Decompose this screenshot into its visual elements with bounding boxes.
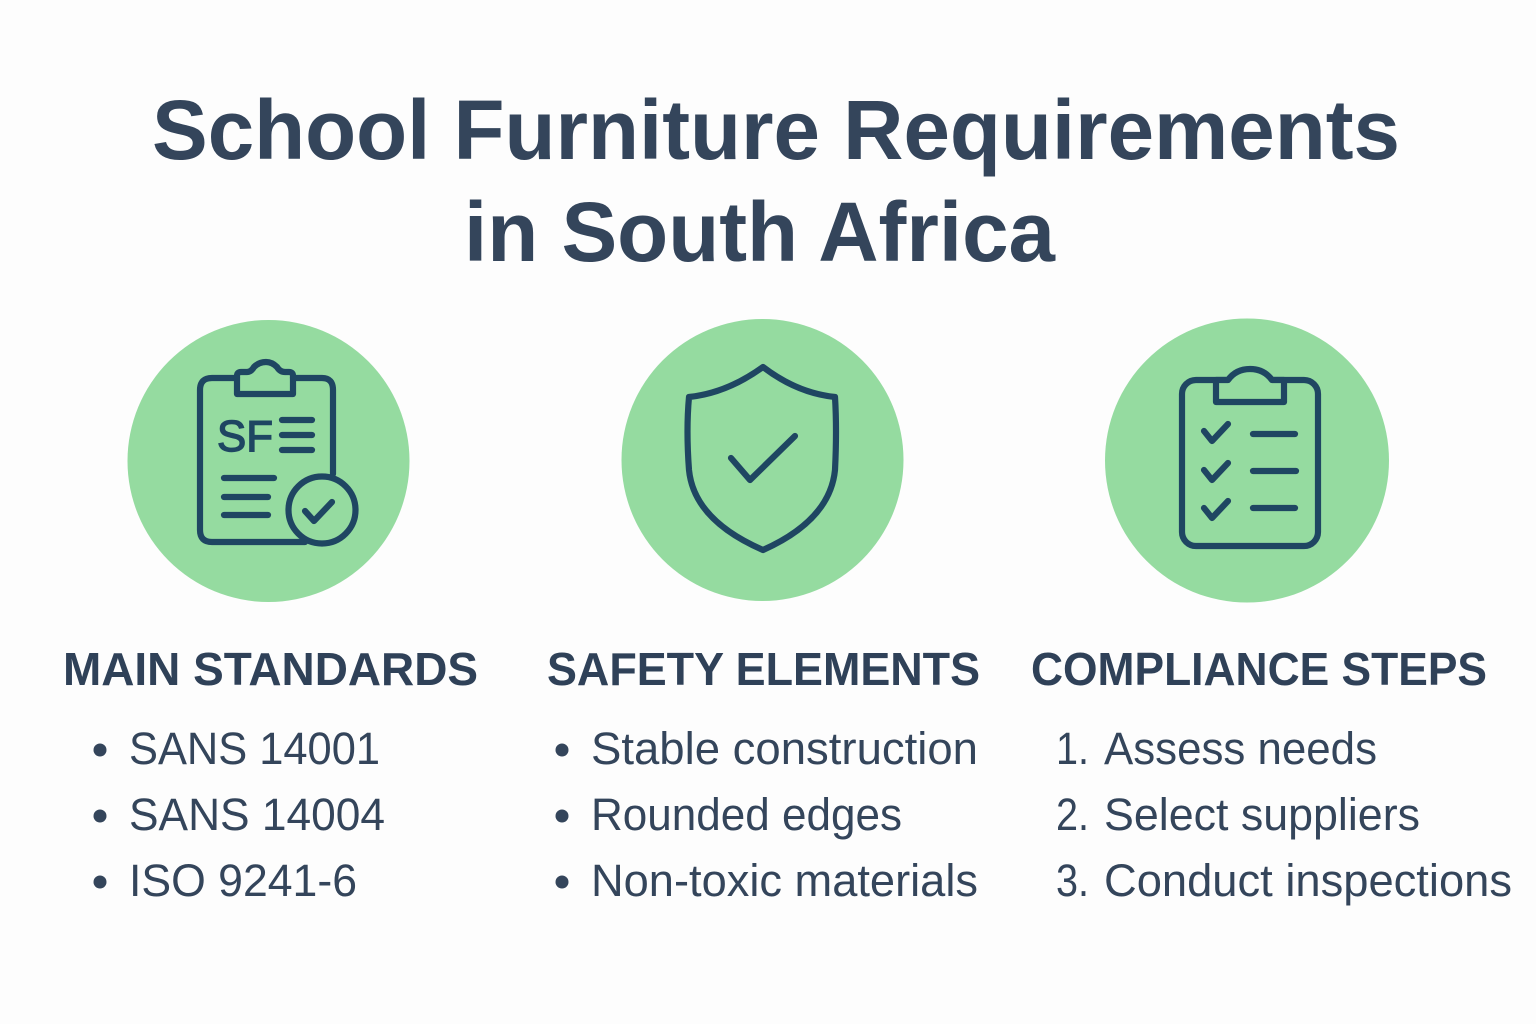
- list: safety: Rounded edges: [591, 789, 902, 840]
- list: standards: SANS 14004: [129, 789, 385, 840]
- list: steps: Conduct inspections: [1104, 855, 1512, 906]
- list: steps: Select suppliers: [1104, 789, 1420, 840]
- title: School Furniture Requirements: [152, 83, 1400, 177]
- title: in South Africa: [464, 185, 1056, 279]
- list: steps: 3.: [1056, 855, 1089, 906]
- panel: main standards: [63, 320, 478, 906]
- list: safety: Stable construction: [591, 723, 978, 774]
- list: steps: Assess needs: [1104, 723, 1377, 774]
- icon: shield with check: [622, 319, 904, 601]
- icon: standards clipboard: [128, 320, 410, 602]
- list: steps: [1056, 723, 1512, 906]
- panel: compliance steps: [1031, 318, 1512, 906]
- icon: standards clipboard: SF: [217, 412, 273, 461]
- list: standards: ISO 9241-6: [129, 855, 357, 906]
- heading: compliance steps: COMPLIANCE STEPS: [1031, 643, 1487, 695]
- list: standards: SANS 14001: [129, 723, 380, 774]
- list: standards: [94, 723, 385, 906]
- panel: safety elements: [547, 319, 980, 906]
- list: steps: 2.: [1056, 789, 1089, 840]
- icon: checklist clipboard: [1105, 318, 1389, 602]
- heading: safety elements: SAFETY ELEMENTS: [547, 643, 980, 695]
- list: safety: Non-toxic materials: [591, 855, 978, 906]
- list: safety: [556, 723, 978, 906]
- list: steps: 1.: [1056, 723, 1089, 774]
- heading: main standards: MAIN STANDARDS: [63, 643, 478, 695]
- title: [152, 83, 1400, 279]
